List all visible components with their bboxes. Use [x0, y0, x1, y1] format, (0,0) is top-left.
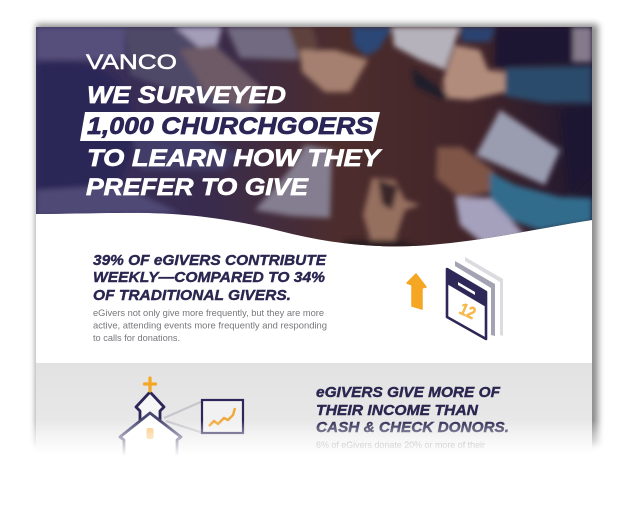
cross [144, 378, 156, 391]
page background [36, 27, 592, 457]
page shadow [36, 24, 598, 446]
logo: VANCO: VANCO [86, 51, 177, 74]
title line 3: TO LEARN HOW THEY [87, 145, 383, 172]
icon: up arrow [407, 274, 426, 309]
panel: weekly giving [93, 252, 327, 343]
heading: eGivers give more: eGIVERS GIVE MORE OF [316, 384, 501, 401]
beams [164, 401, 203, 433]
title highlight: 1,000 churchgoers: 1,000 CHURCHGOERS [87, 113, 374, 140]
trend line [209, 408, 235, 426]
title line 1: WE SURVEYED [87, 82, 286, 109]
heading: 39% of eGivers: WEEKLY—COMPARED TO 34% [93, 269, 326, 286]
bottom fade [0, 420, 627, 456]
heading: 39% of eGivers [93, 252, 327, 304]
body text: 6% of eGivers donate 20% or more of their [316, 439, 485, 450]
heading: 39% of eGivers: OF TRADITIONAL GIVERS. [93, 287, 291, 304]
body text: to calls for donations. [93, 332, 180, 343]
panel: income comparison [36, 363, 592, 458]
heading: eGivers give more: THEIR INCOME THAN [316, 402, 479, 419]
body text: eGivers not only give more frequently, but they are more [93, 307, 324, 318]
icon: calendar: 12 [456, 299, 479, 323]
grey band [36, 363, 592, 453]
icon: church with chart [120, 378, 243, 458]
heading: eGivers give more: CASH & CHECK DONORS. [316, 419, 509, 436]
title line 4: PREFER TO GIVE [86, 174, 309, 201]
heading: 39% of eGivers: 39% OF eGIVERS CONTRIBUTE [93, 252, 327, 269]
nave [120, 413, 181, 458]
body text [93, 307, 327, 343]
icon: calendar [447, 257, 503, 339]
window [146, 428, 154, 439]
header photo: hands in prayer around a table [36, 27, 592, 252]
heading: eGivers give more [316, 384, 509, 436]
chart frame [202, 400, 243, 433]
body text: active, attending events more frequently and responding [93, 320, 327, 330]
title [80, 82, 383, 201]
steeple [136, 392, 164, 422]
